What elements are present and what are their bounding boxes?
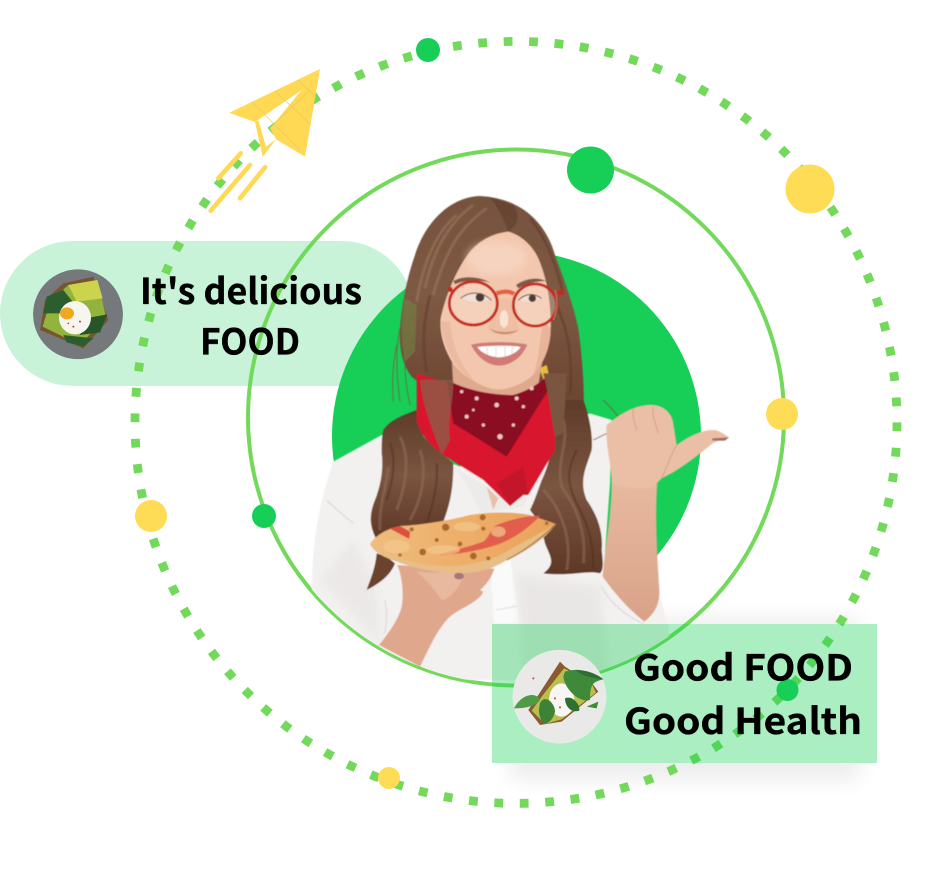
panel: delicious food pill background [0, 241, 414, 386]
decorative dot: green on card [776, 679, 798, 701]
hair over right of bandana [543, 373, 567, 437]
face shading [441, 322, 474, 380]
blouse [310, 413, 673, 680]
photo: white plate with leafy toast [512, 650, 606, 744]
heading: Good FOOD Good Health [624, 640, 862, 745]
soft shadow of bottom card [510, 618, 860, 780]
outer dotted circle [135, 41, 897, 803]
decorative dot: green on inner ring left [252, 504, 276, 528]
hair locks [367, 400, 618, 590]
icon: paper plane [211, 69, 320, 211]
face [440, 232, 564, 402]
heading: Good FOOD Good Health: Good Health [624, 693, 862, 745]
inner circle ring [248, 150, 784, 686]
egg white [549, 683, 574, 717]
decorative dot: yellow left [135, 500, 167, 532]
pizza [370, 512, 556, 573]
mouth [471, 342, 527, 366]
fist with thumb [606, 405, 729, 489]
neck [451, 362, 542, 396]
pizza sauce [438, 516, 540, 555]
nose [489, 299, 518, 332]
speed lines [211, 153, 265, 211]
skin in blouse V [487, 487, 498, 510]
decorative dot: yellow on inner ring [766, 398, 798, 430]
bread [528, 662, 598, 725]
heading: It's delicious FOOD: It's delicious [140, 264, 362, 315]
bandana pattern [447, 375, 548, 457]
eyebrows [453, 277, 546, 288]
pizza crust [370, 524, 556, 573]
heading: It's delicious FOOD [140, 264, 362, 365]
pizza char spots [398, 514, 548, 560]
heading: Good FOOD Good Health: Good FOOD [633, 640, 853, 692]
forearm [603, 483, 659, 622]
yellow scarf detail [540, 364, 549, 380]
illustration: smiling woman holding pizza [310, 196, 729, 680]
photo: plate with egg avocado toast [33, 269, 123, 359]
decorative dot: large green top [567, 146, 614, 194]
spinach [43, 290, 74, 313]
toast [40, 277, 108, 348]
head hair back [393, 196, 584, 415]
glasses [449, 282, 557, 326]
lens tint [450, 282, 556, 325]
bandana [417, 373, 567, 506]
leaves [563, 670, 603, 701]
decorative dot: yellow bottom [378, 767, 400, 789]
heading: It's delicious FOOD: FOOD [200, 314, 300, 365]
pizza mottling [383, 522, 506, 555]
green background disc [332, 252, 701, 620]
eyes [461, 293, 541, 302]
hand under pizza [379, 565, 494, 667]
poached egg [59, 301, 91, 334]
decorative dot: large yellow top right [786, 164, 834, 214]
decorative dot: green on dotted ring [416, 38, 440, 62]
panel: good food good health card [492, 624, 877, 763]
